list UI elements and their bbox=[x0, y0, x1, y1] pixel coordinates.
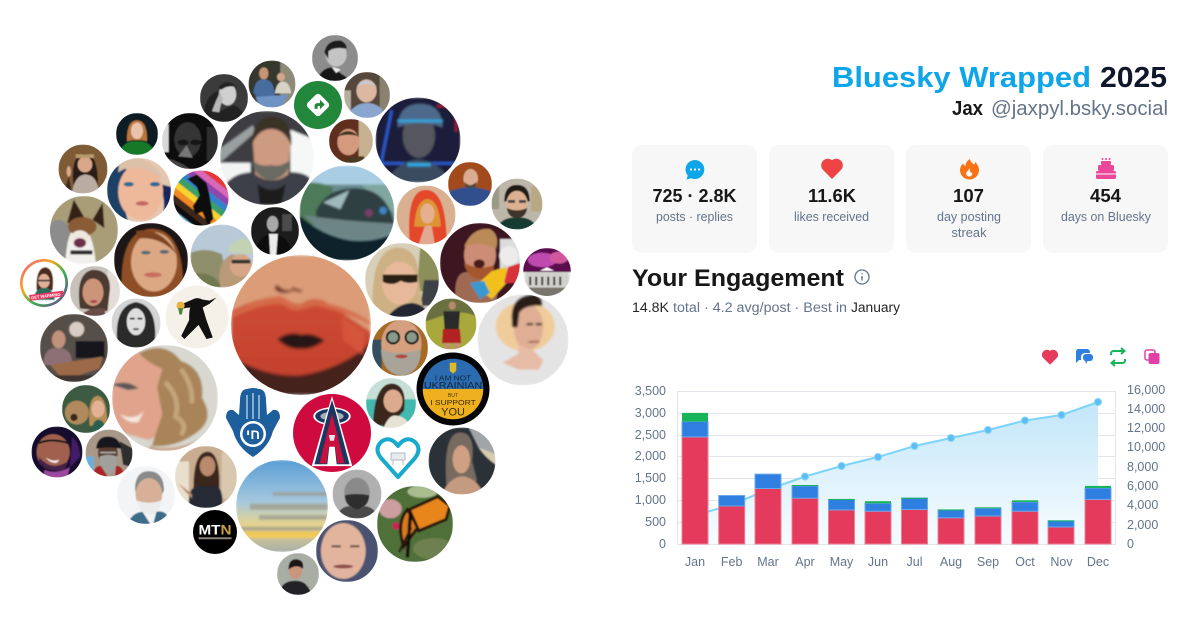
month labels: Mar bbox=[757, 555, 779, 569]
month labels: Dec bbox=[1087, 555, 1109, 569]
month labels: Jul bbox=[907, 555, 922, 569]
avatar: bald smiling man bbox=[316, 520, 378, 582]
icon: birthday cake bbox=[1096, 158, 1116, 179]
avatar: illustrated woman by the sea bbox=[366, 378, 416, 428]
month labels: Sep bbox=[977, 555, 999, 569]
user name and handle: @jaxpyl.bsky.social bbox=[991, 98, 1168, 120]
avatar: smiling bearded man with purple tint bbox=[32, 426, 82, 478]
icon: flame bbox=[960, 159, 979, 180]
avatar: dark black and white selfie bbox=[162, 113, 218, 169]
avatar: man with round glasses and grey beard bbox=[372, 320, 428, 376]
user name and handle: Jax bbox=[952, 98, 983, 120]
avatar cloud: circle pack of profile pictures bbox=[20, 35, 571, 595]
month labels: Feb bbox=[721, 555, 743, 569]
right axis labels bbox=[1127, 383, 1165, 551]
icon: info bbox=[855, 270, 869, 284]
avatar: smiling man indoors bbox=[329, 119, 373, 163]
icon: quotes legend bbox=[1145, 350, 1160, 364]
engagement summary text bbox=[632, 300, 900, 315]
cumulative points bbox=[802, 398, 1102, 480]
right axis labels: 2,000 bbox=[1127, 518, 1158, 532]
avatar: man with grey beard and dark jacket bbox=[220, 111, 314, 205]
panel: days on Bluesky stat: 454 bbox=[1090, 186, 1121, 206]
bars: replies bbox=[682, 422, 1111, 527]
right axis labels: 4,000 bbox=[1127, 498, 1158, 512]
avatar: Angels baseball logo bbox=[293, 394, 371, 472]
month labels: Oct bbox=[1015, 555, 1035, 569]
icon: teal heart with piano sketch bbox=[378, 439, 418, 477]
cumulative area bbox=[695, 402, 1098, 544]
avatar: blonde woman in green bbox=[116, 113, 158, 155]
avatar: Ukraine support badge: BUT bbox=[448, 393, 458, 399]
month labels: May bbox=[830, 555, 854, 569]
panel: likes stat bbox=[769, 145, 894, 253]
y axis grid bbox=[677, 391, 1116, 544]
avatar: woman with auburn hair bbox=[114, 223, 188, 297]
avatar: black and white man with hand on head bbox=[200, 74, 248, 122]
engagement summary text: 14.8K bbox=[632, 300, 669, 315]
avatar: illustrated girl with deer ears bbox=[58, 144, 108, 194]
month labels: Jun bbox=[868, 555, 888, 569]
bars: likes bbox=[682, 437, 1111, 544]
month labels: Nov bbox=[1050, 555, 1073, 569]
right axis labels: 10,000 bbox=[1127, 440, 1165, 454]
icon: blue hamsa hand logo: חי bbox=[246, 426, 260, 442]
panel: posting streak stat: day posting bbox=[937, 210, 1001, 224]
right axis labels: 6,000 bbox=[1127, 479, 1158, 493]
icon: blue hamsa hand logo bbox=[226, 388, 280, 457]
avatar: Banksy flower thrower bbox=[166, 286, 228, 348]
chart legend icons bbox=[1042, 348, 1160, 366]
avatar: woman in sun hat on hillside bbox=[190, 224, 254, 288]
left axis labels bbox=[635, 384, 666, 551]
avatar: MTN logo: MTN bbox=[198, 523, 232, 538]
left axis labels: 2,000 bbox=[635, 449, 666, 463]
avatar: painted portrait of a man bbox=[478, 294, 568, 386]
avatar: woman with curly dog bbox=[62, 385, 110, 433]
left axis labels: 0 bbox=[659, 537, 666, 551]
avatar: cartoon with rainbow ring bbox=[20, 259, 68, 307]
panel: likes stat: likes received bbox=[794, 210, 869, 224]
left axis labels: 1,500 bbox=[635, 471, 666, 485]
panel: posting streak stat: 107 bbox=[953, 186, 984, 206]
avatar: Ukraine support badge: UKRAINIAN bbox=[424, 380, 482, 390]
right axis labels: 16,000 bbox=[1127, 383, 1165, 397]
icon: replies legend bbox=[1076, 349, 1093, 364]
avatar: monarch butterfly on flowers bbox=[377, 486, 455, 562]
icon: heart legend bbox=[1042, 350, 1058, 364]
right axis labels: 12,000 bbox=[1127, 421, 1165, 435]
avatar: sunset with clouds bbox=[236, 460, 328, 552]
panel: posts and replies stat: 725 · 2.8K bbox=[652, 186, 736, 206]
avatar: man in navy sweater bbox=[448, 162, 492, 206]
avatar: man in bow tie bbox=[312, 35, 358, 81]
avatar: woman with flowing blonde-brown hair bbox=[112, 345, 218, 451]
month labels: Aug bbox=[940, 555, 962, 569]
engagement summary text: January bbox=[851, 300, 900, 315]
month labels: Jan bbox=[685, 555, 705, 569]
left axis labels: 500 bbox=[645, 515, 666, 529]
avatar: woman with blue eyes bbox=[107, 158, 171, 222]
bars: reposts bbox=[682, 413, 1111, 521]
avatar: crying boxer with red beard bbox=[440, 223, 520, 303]
engagement summary text: total · 4.2 avg/post · Best in bbox=[673, 300, 847, 315]
avatar: blonde woman in red hood bbox=[396, 186, 456, 244]
heading: Your Engagement: Your Engagement bbox=[632, 265, 844, 292]
avatar: Ukraine support badge: I AM NOT bbox=[435, 375, 472, 382]
title: 2025 bbox=[1100, 62, 1167, 94]
avatar: brown haired woman in car bbox=[70, 266, 120, 316]
icon: speech bubble bbox=[685, 160, 704, 180]
panel: posts and replies stat bbox=[632, 145, 757, 253]
avatar: woman with wavy hair, black and white bbox=[112, 298, 160, 348]
month labels bbox=[685, 555, 1109, 569]
panel: likes stat: 11.6K bbox=[808, 186, 856, 206]
right axis labels: 0 bbox=[1127, 537, 1134, 551]
left axis labels: 3,500 bbox=[635, 384, 666, 398]
avatar: smiling older man in plaid bbox=[344, 72, 390, 118]
avatar: MTN logo bbox=[193, 510, 237, 554]
avatar: smiling woman in car bbox=[428, 428, 496, 494]
avatar: cartoon with rainbow ring: GET WARMING bbox=[31, 292, 61, 300]
panel: days on Bluesky stat bbox=[1043, 145, 1168, 253]
left axis labels: 1,000 bbox=[635, 493, 666, 507]
right axis labels: 8,000 bbox=[1127, 460, 1158, 474]
avatar: man in dark suit, black and white bbox=[251, 207, 299, 255]
left axis labels: 2,500 bbox=[635, 428, 666, 442]
avatar: bearded man, black and white bbox=[332, 470, 382, 518]
avatar: man with black cap and grey beard bbox=[86, 430, 132, 476]
avatar: green repost logo bbox=[294, 81, 342, 129]
left axis labels: 3,000 bbox=[635, 406, 666, 420]
icon: reposts legend bbox=[1111, 348, 1125, 366]
cumulative line bbox=[695, 402, 1098, 515]
panel: posts and replies stat: posts · replies bbox=[656, 210, 733, 224]
avatar: sci-fi helmet character bbox=[376, 98, 460, 182]
avatar: man in tartan kilt in a garden bbox=[426, 298, 476, 350]
avatar: man with dark hair in grey-green room bbox=[277, 553, 319, 595]
panel: days on Bluesky stat: days on Bluesky bbox=[1061, 210, 1152, 224]
avatar: rainbow flag silhouette bbox=[174, 170, 228, 226]
avatar: older man with grey hair and white beard bbox=[117, 466, 175, 524]
avatar: Ukraine support badge: YOU bbox=[441, 407, 465, 419]
title: Bluesky Wrapped bbox=[832, 62, 1091, 94]
chart: monthly engagement stacked bars with cumulative line bbox=[635, 383, 1165, 569]
avatar: White House with pink fireworks bbox=[523, 248, 571, 297]
avatar: blonde woman in sunglasses bbox=[365, 243, 439, 317]
avatar: two men on a sofa bbox=[248, 60, 296, 108]
avatar: woman with long dark hair bbox=[175, 446, 237, 508]
avatar: smiling man with glasses bbox=[492, 178, 542, 230]
avatar: winged cap on a car dashboard bbox=[300, 166, 394, 260]
icon: heart bbox=[822, 160, 842, 178]
avatar: extreme close-up of lips (largest) bbox=[231, 255, 371, 395]
avatar: Ukraine support badge bbox=[416, 352, 490, 426]
right axis labels: 14,000 bbox=[1127, 402, 1165, 416]
avatar: tri-colour dog bbox=[45, 196, 118, 264]
avatar: man with guitar bbox=[40, 314, 108, 382]
avatar: Ukraine support badge: I SUPPORT bbox=[430, 398, 476, 407]
month labels: Apr bbox=[795, 555, 815, 569]
panel: posting streak stat: streak bbox=[952, 226, 987, 240]
panel: posting streak stat bbox=[906, 145, 1031, 253]
